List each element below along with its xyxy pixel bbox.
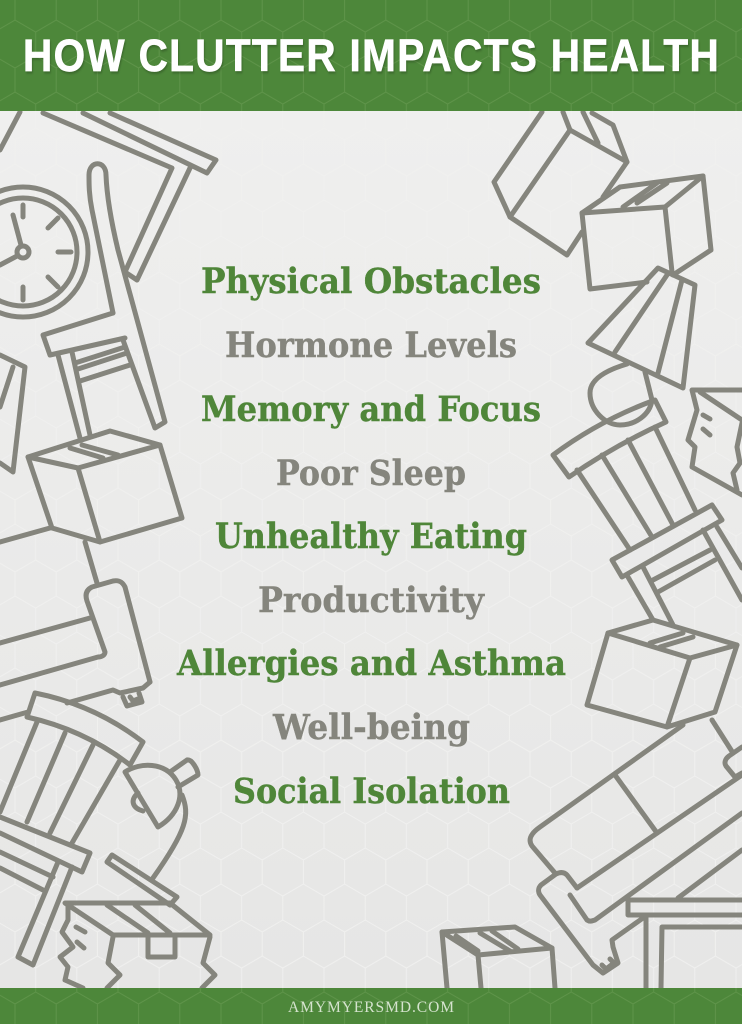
icon: wall clock (0, 187, 88, 317)
icon: lamp shade fragment left (0, 355, 25, 472)
footer band (0, 988, 742, 1024)
item: hormone levels: Hormone Levels (225, 325, 517, 366)
icon: chair lower left (0, 693, 143, 965)
item: physical obstacles: Physical Obstacles (201, 261, 541, 302)
icon: table lower right (628, 900, 742, 988)
item: poor sleep: Poor Sleep (276, 453, 466, 494)
icon: box bottom centre (442, 927, 555, 988)
footer website: AMYMYERSMD.COM (288, 999, 454, 1016)
icon: chair right (553, 400, 742, 625)
icon: chair upper left (43, 164, 165, 438)
item: memory and focus: Memory and Focus (201, 389, 541, 430)
item: well-being: Well-being (272, 707, 470, 748)
icon: torn box lower left (60, 903, 215, 988)
text list: health impacts (176, 261, 566, 812)
icon: sofa right (530, 720, 742, 973)
icon: torn box right (688, 390, 742, 495)
icon: stray line top left (0, 112, 20, 150)
title: HOW CLUTTER IMPACTS HEALTH (23, 31, 719, 82)
icon: sofa left (0, 528, 150, 720)
icon: box upper right (582, 176, 711, 289)
header band (0, 0, 742, 111)
icon: box lower right (587, 620, 737, 727)
item: social isolation: Social Isolation (233, 771, 510, 812)
item: productivity: Productivity (258, 580, 486, 621)
item: allergies and asthma: Allergies and Asthma (176, 643, 566, 684)
icon: tilted box top right (494, 112, 627, 255)
icon: box left (28, 431, 182, 542)
icon: table lamp right (588, 268, 695, 425)
icon: table top left (43, 113, 216, 280)
item: unhealthy eating: Unhealthy Eating (215, 516, 527, 557)
icon: desk lamp (107, 760, 198, 905)
